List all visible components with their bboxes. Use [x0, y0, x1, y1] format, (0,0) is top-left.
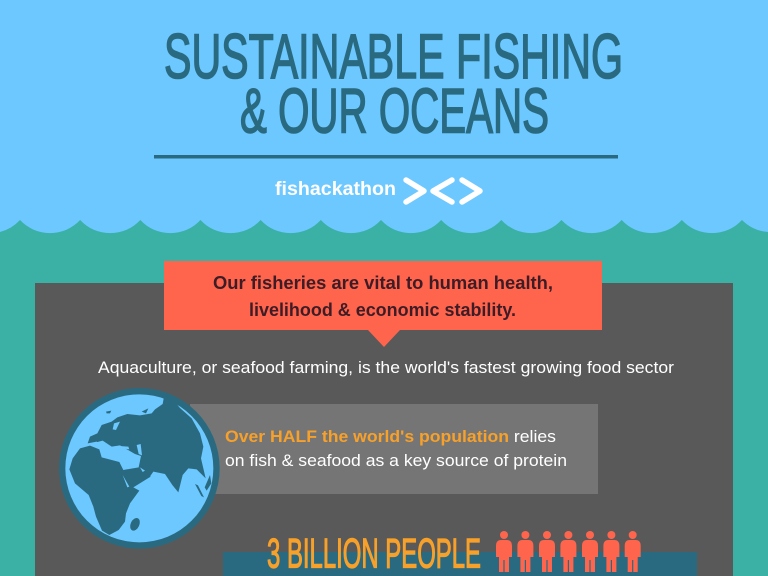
population fact text: [225, 427, 567, 470]
person: [539, 531, 555, 572]
person: [625, 531, 641, 572]
Africa and Arabia: [69, 446, 151, 535]
title: & OUR OCEANS: [240, 76, 549, 146]
title underline: [154, 155, 618, 158]
Madagascar: [128, 516, 142, 532]
aquaculture statement: Aquaculture, or seafood farming, is the world's fastest growing food sector: [98, 358, 674, 377]
callout text: Our fisheries are vital to human health,: [213, 273, 553, 293]
Arctic islands: [106, 408, 148, 413]
callout text: [213, 273, 553, 320]
dark content panel: [35, 283, 733, 576]
southeast Asia islands: [195, 475, 211, 497]
title: [164, 22, 623, 146]
person: [496, 531, 512, 572]
callout text: livelihood & economic stability.: [249, 300, 516, 320]
Eurasia: [88, 397, 206, 492]
3 billion people heading: 3 BILLION PEOPLE: [267, 530, 481, 576]
logo chevrons: [406, 180, 480, 202]
person: [517, 531, 533, 572]
person: [560, 531, 576, 572]
population fact text: on fish & seafood as a key source of protein: [225, 451, 567, 470]
sky header with wave edge: [0, 0, 768, 233]
inland seas: [95, 422, 145, 487]
callout banner: [164, 261, 602, 347]
icon: globe: [59, 388, 220, 549]
bottom teal bar: [223, 552, 697, 576]
population fact box: [190, 404, 598, 494]
icon row: people: [496, 531, 641, 572]
population fact text: Over HALF the world's population relies: [225, 427, 556, 446]
person: [603, 531, 619, 572]
logo wordmark: fishackathon: [275, 179, 396, 200]
fishackathon logo: [275, 179, 480, 202]
person: [582, 531, 598, 572]
